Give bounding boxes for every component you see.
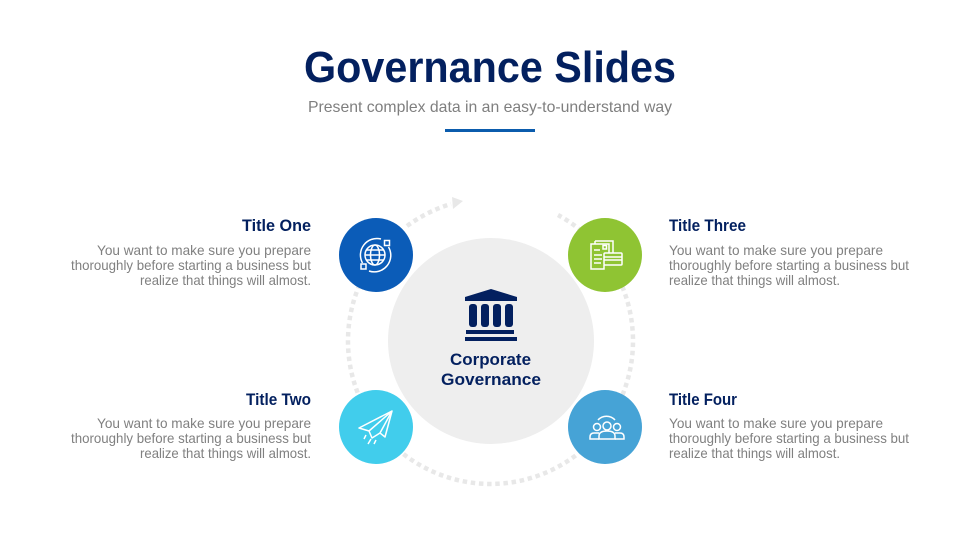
text block: Title Two xyxy=(71,390,311,461)
text block: Title Three: realize that things will almost. xyxy=(669,273,840,288)
centre label: Governance xyxy=(441,370,541,389)
centre label xyxy=(441,350,541,389)
title: Governance Slides xyxy=(304,43,676,92)
text block: Title Three: Title Three xyxy=(669,216,746,235)
centre label: Corporate xyxy=(450,350,531,369)
text block: Title Four: thoroughly before starting a business but xyxy=(669,431,909,446)
text block: Title Four: Title Four xyxy=(669,390,737,409)
text block: Title Three: thoroughly before starting a business but xyxy=(669,258,909,273)
text block: Title Three: You want to make sure you prepare xyxy=(669,243,883,258)
text block: Title Three xyxy=(669,216,909,288)
text block: Title One xyxy=(71,216,311,288)
subtitle: Present complex data in an easy-to-understand way xyxy=(308,99,672,116)
text block: Title One: Title One xyxy=(242,216,311,235)
icon: government building xyxy=(465,289,517,341)
text block: Title Two: thoroughly before starting a business but xyxy=(71,431,311,446)
icon: paper plane on cyan circle xyxy=(339,390,413,464)
title underline xyxy=(445,129,535,132)
icon: globe on blue circle xyxy=(339,218,413,292)
text block: Title Two: Title Two xyxy=(246,390,311,409)
centre circle xyxy=(388,238,594,444)
dotted cycle ring with arrow xyxy=(348,197,633,484)
text block: Title Four: realize that things will almost. xyxy=(669,446,840,461)
text block: Title One: You want to make sure you prepare xyxy=(97,243,311,258)
text block: Title One: realize that things will almost. xyxy=(140,273,311,288)
text block: Title Two: realize that things will almost. xyxy=(140,446,311,461)
text block: Title Four xyxy=(669,390,909,461)
text block: Title Four: You want to make sure you prepare xyxy=(669,416,883,431)
text block: Title One: thoroughly before starting a business but xyxy=(71,258,311,273)
text block: Title Two: You want to make sure you prepare xyxy=(97,416,311,431)
icon: people on blue circle xyxy=(568,390,642,464)
icon: document and card on green circle xyxy=(568,218,642,292)
